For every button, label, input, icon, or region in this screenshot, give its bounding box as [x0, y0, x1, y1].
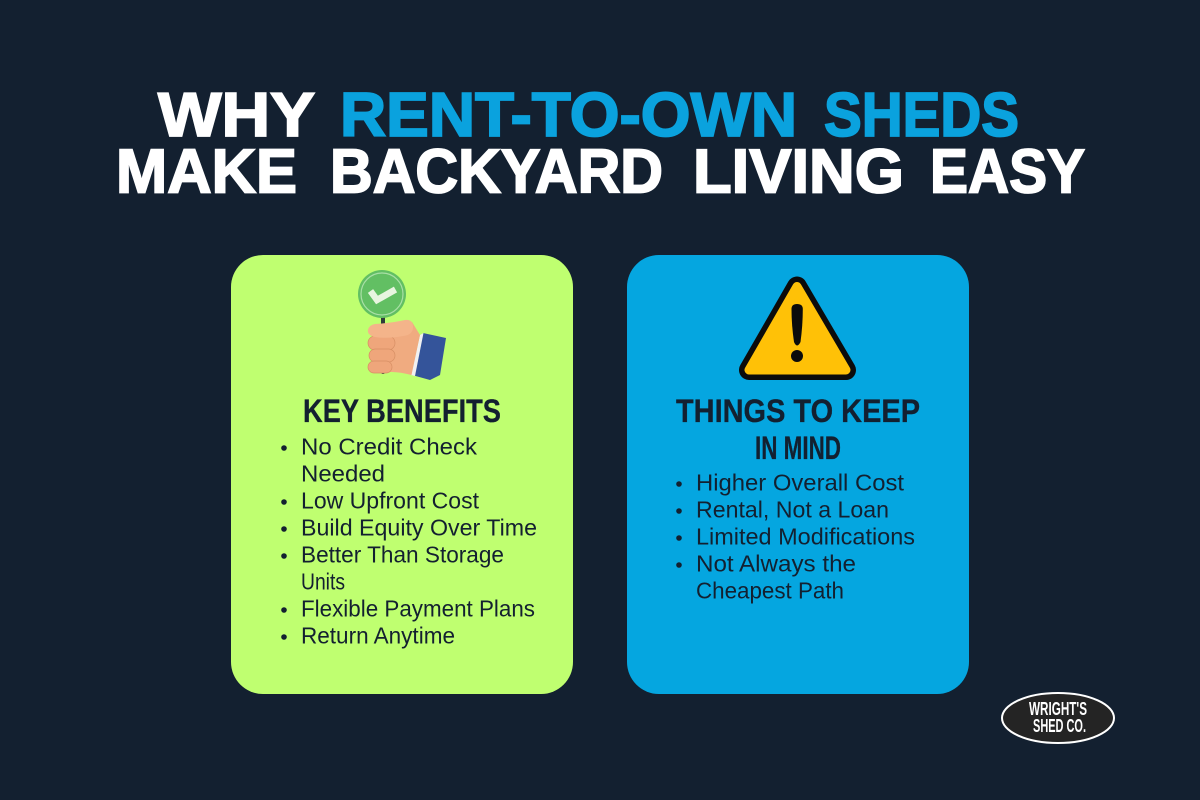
heading: key benefits: KEY BENEFITS [303, 393, 501, 429]
list: benefits: Flexible Payment Plans [301, 596, 535, 622]
title: EASY [930, 138, 1085, 206]
heading: things to keep in mind: IN MIND [755, 430, 841, 466]
list: benefits: Build Equity Over Time [301, 514, 537, 540]
title: BACKYARD [330, 138, 663, 206]
list: cautions: Not Always the [696, 550, 856, 576]
panel: key benefits [231, 255, 573, 694]
logo: Wright's Shed Co.: WRIGHT'S [1029, 699, 1087, 719]
icon: hand holding green check sign [358, 270, 446, 380]
list: cautions: Higher Overall Cost [696, 470, 905, 496]
title: LIVING [693, 138, 904, 206]
list: cautions [676, 470, 915, 604]
title: RENT-TO-OWN [340, 81, 797, 150]
heading: things to keep in mind [676, 393, 920, 466]
logo: Wright's Shed Co. [1002, 693, 1114, 743]
list: benefits: Units [301, 568, 345, 594]
title: MAKE [116, 138, 297, 206]
list: benefits [281, 434, 537, 648]
panel: things to keep in mind [627, 255, 969, 694]
list: benefits: Better Than Storage [301, 542, 504, 568]
title [116, 81, 1085, 206]
icon: warning triangle [749, 286, 846, 370]
title: SHEDS [824, 81, 1019, 150]
logo: Wright's Shed Co.: SHED CO. [1033, 716, 1086, 736]
list: benefits: No Credit Check [301, 434, 478, 460]
list: cautions: Rental, Not a Loan [696, 496, 889, 522]
heading: things to keep in mind: THINGS TO KEEP [676, 393, 920, 429]
list: benefits: Needed [301, 460, 385, 486]
title: WHY [158, 81, 315, 150]
list: benefits: Return Anytime [301, 622, 455, 648]
list: cautions: Cheapest Path [696, 578, 844, 604]
list: benefits: Low Upfront Cost [301, 488, 480, 514]
list: cautions: Limited Modifications [696, 524, 915, 550]
